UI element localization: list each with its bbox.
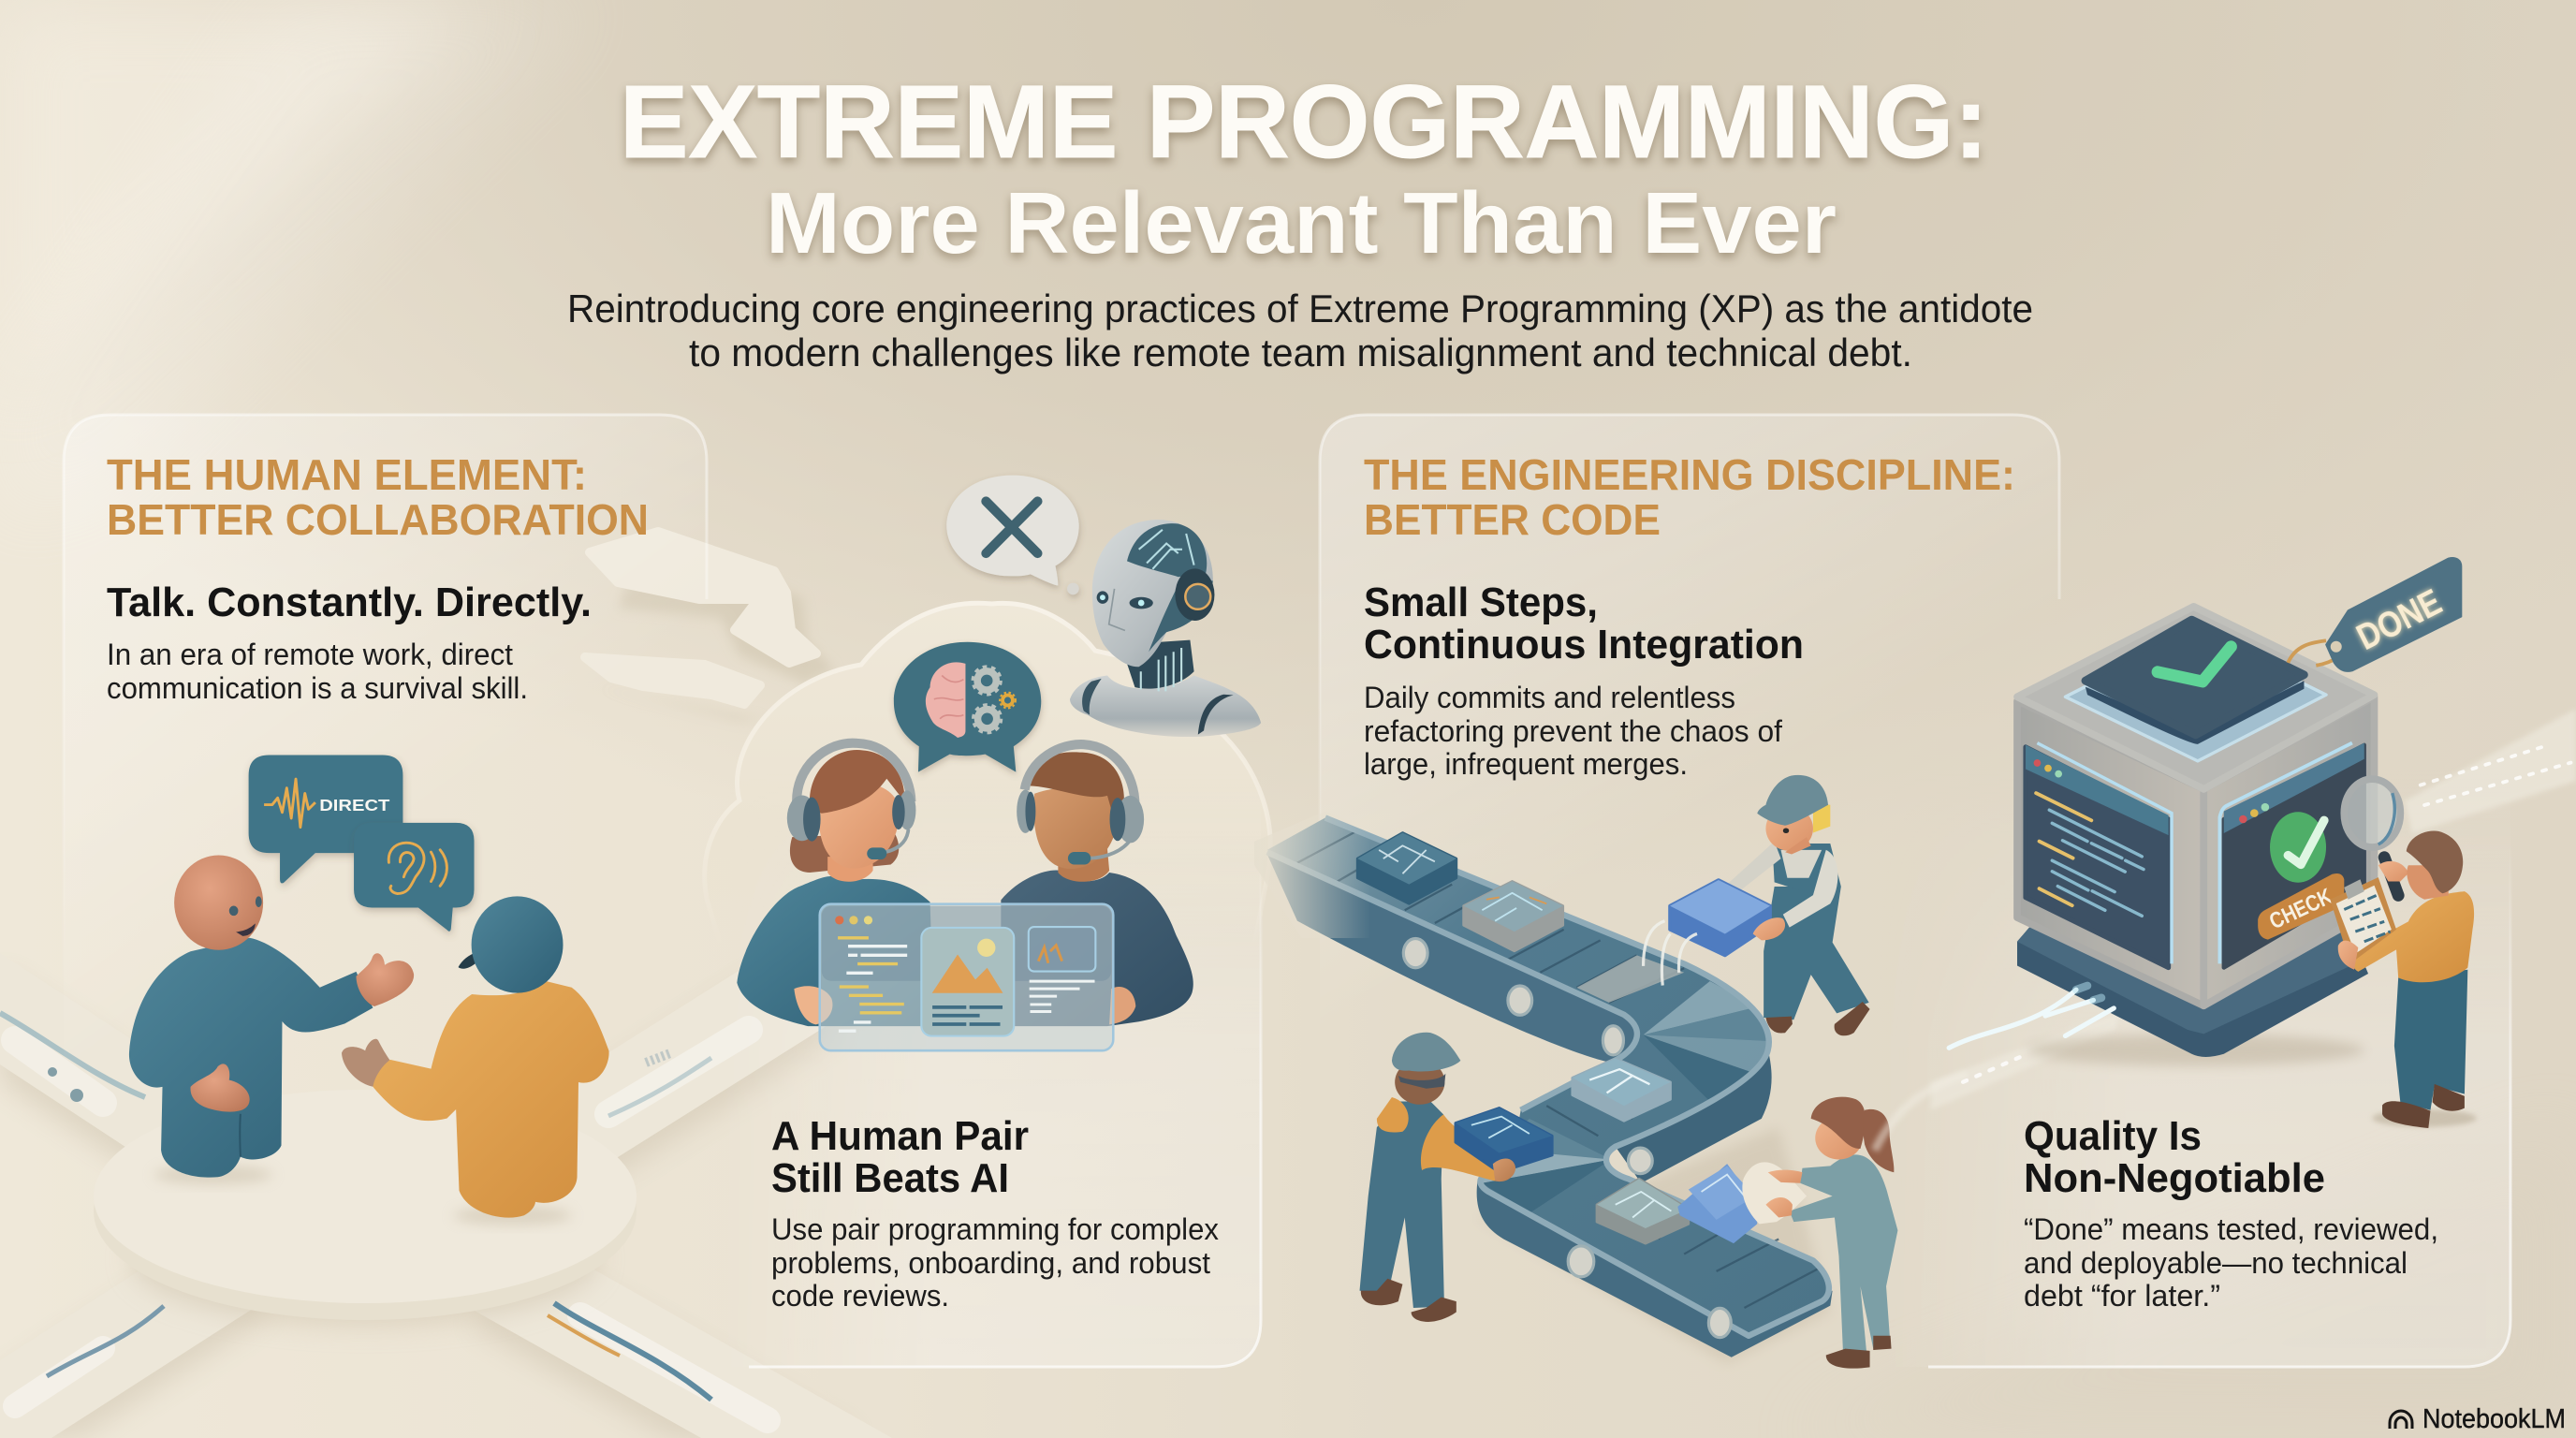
panel: human element [64,415,1261,1367]
text block: human pair: A Human Pair [771,1113,1029,1159]
text block: human pair: problems, onboarding, and robust [771,1246,1210,1280]
done tag: DONE [2350,582,2448,658]
done tag [2288,558,2461,671]
platform with channels [0,532,892,1438]
fade on left end of belt [1254,812,1370,938]
amber person [342,896,609,1218]
left code screen [2026,743,2172,968]
worker with helmet: holding chip [1360,1033,1552,1322]
section heading: human element: BETTER COLLABORATION [107,495,649,544]
text block: small steps: refactoring prevent the chaos of [1364,714,1782,748]
cube body [2017,607,2374,1005]
worker with helmet: pouring [1644,775,1870,1035]
inspector person [2330,779,2477,1128]
subtitle: More Relevant Than Ever [766,174,1837,271]
ground shadow [1478,1127,1830,1364]
cloud backdrop [705,603,1270,946]
description: to modern challenges like remote team misalignment and technical debt. [689,330,1912,374]
right check screen: CHECK [2265,884,2336,934]
title: EXTREME PROGRAMMING: [620,65,1988,180]
man with headset [1001,744,1193,1026]
belt slats [1297,830,1818,1308]
text block: talk constantly: Talk. Constantly. Directly. [107,580,592,625]
robot [1070,520,1261,737]
teal person [129,856,414,1178]
brand: NotebookLM: NotebookLM [2422,1404,2566,1434]
text block: human pair: Still Beats AI [771,1155,1009,1201]
text block: quality: Non-Negotiable [2024,1155,2325,1201]
glass tube: upper right [608,1030,749,1116]
right check screen [2219,743,2364,968]
section heading: human element [107,450,649,544]
description: Reintroducing core engineering practices of Extreme Programming (XP) as the antidote [567,286,2033,330]
circuit chips [1357,833,1689,1243]
pulleys [1403,939,1731,1338]
glass tube: upper left [0,1013,145,1103]
section heading: engineering discipline [1364,450,2015,544]
cube base [2017,926,2368,1066]
text block: human pair [771,1113,1219,1313]
ribbon wave [585,532,835,721]
text block: talk constantly: communication is a survival skill. [107,671,528,705]
belt side walls [1267,855,1833,1357]
clipboard [2330,877,2396,963]
speech bubble: rejection X [946,476,1079,594]
text block: quality: debt “for later.” [2024,1279,2220,1313]
text block: small steps [1364,580,1804,781]
text block: quality [2024,1113,2438,1313]
worker with ponytail: polishing [1677,1097,1897,1369]
held chip [1456,1108,1552,1172]
glass tube: lower right [548,1303,768,1420]
illustration: conveyor belt with workers [1254,775,1897,1369]
illustration: quality cube with inspector [1875,558,2576,1151]
speech bubble: brain and gears [894,642,1041,772]
data stream bands [1875,709,2576,1151]
belt rims [1267,817,1829,1336]
panel: engineering discipline [1320,415,2510,1367]
magnifying glass [2344,779,2400,895]
speech bubble: direct: DIRECT [319,796,389,814]
illustration: two people talking [129,756,609,1225]
section heading: human element: THE HUMAN ELEMENT: [107,450,587,499]
text block: talk constantly [107,580,592,705]
top plate with check [2065,620,2326,761]
section heading: engineering discipline: THE ENGINEERING DISCIPLINE: [1364,450,2015,499]
glass tube: lower left [15,1306,164,1406]
section heading: engineering discipline: BETTER CODE [1364,495,1661,544]
text block: small steps: Daily commits and relentless [1364,681,1735,714]
text block: small steps: Continuous Integration [1364,622,1804,668]
illustration: human pair and AI robot [737,476,1261,1050]
belt fan wedges [1482,981,1775,1213]
woman with headset [737,743,934,1026]
blue chip and cloth [1677,1162,1807,1243]
text block: quality: and deployable—no technical [2024,1246,2408,1280]
belt surface [1267,817,1829,1336]
text block: quality: “Done” means tested, reviewed, [2024,1212,2438,1246]
text block: small steps: Small Steps, [1364,580,1598,625]
glowing fibre cables [1949,986,2114,1048]
text block: talk constantly: In an era of remote work, direct [107,638,513,671]
speech bubble: direct [249,756,402,883]
description [567,286,2033,374]
text block: human pair: code reviews. [771,1279,949,1313]
speech bubble: listening ear [354,823,475,932]
text block: small steps: large, infrequent merges. [1364,747,1688,781]
glass code screen [820,904,1113,1050]
text block: quality: Quality Is [2024,1113,2202,1159]
blue box held [1670,880,1770,955]
text block: human pair: Use pair programming for complex [771,1212,1219,1246]
